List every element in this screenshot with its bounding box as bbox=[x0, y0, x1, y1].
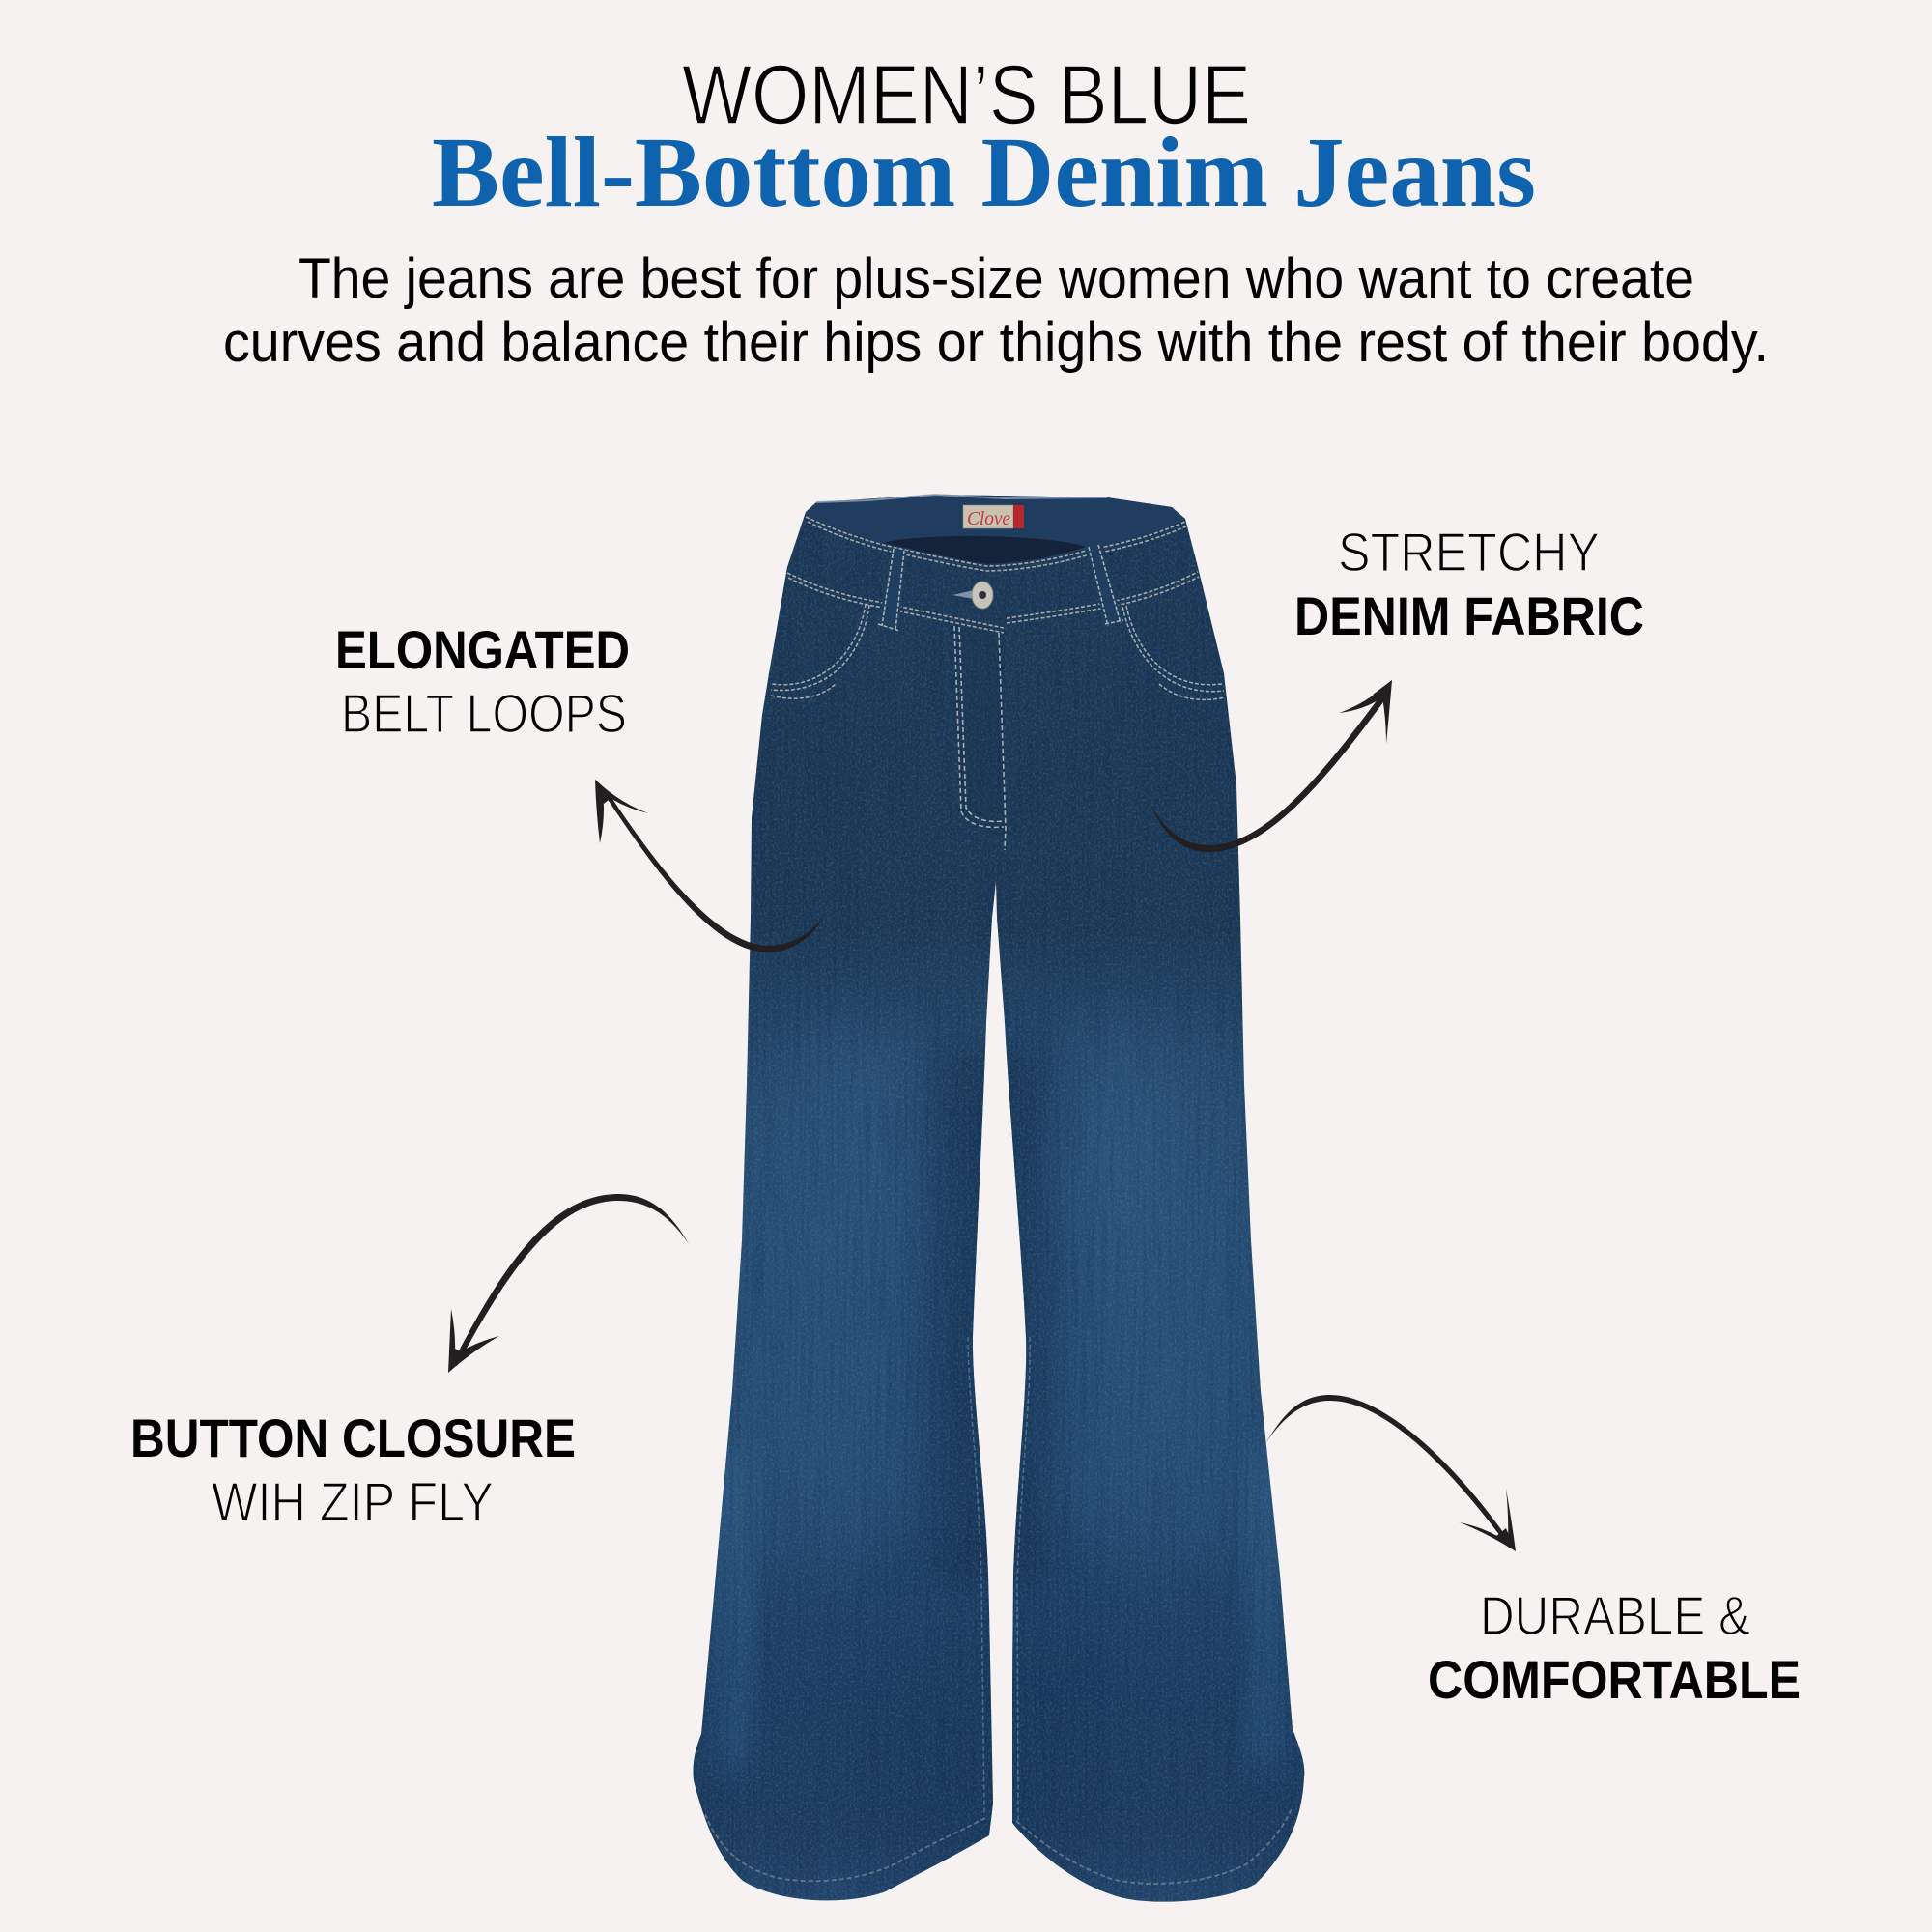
jeans body bbox=[693, 495, 1304, 1902]
title line: women's blue: WOMEN’S BLUE bbox=[682, 48, 1251, 142]
label: stretchy denim fabric: STRETCHY bbox=[1338, 522, 1600, 583]
brand label: Clove bbox=[967, 508, 1010, 529]
label: button closure with zip fly: BUTTON CLOSURE bbox=[130, 1407, 576, 1468]
arrow: to durable and comfortable bbox=[1266, 1395, 1516, 1551]
label: durable and comfortable: DURABLE & bbox=[1480, 1585, 1750, 1647]
belt loop right bbox=[1086, 544, 1123, 627]
jeans illustration bbox=[676, 483, 1314, 1913]
label: elongated belt loops: BELT LOOPS bbox=[341, 683, 627, 745]
label: stretchy denim fabric: DENIM FABRIC bbox=[1294, 585, 1644, 646]
label: button closure with zip fly: WIH ZIP FLY bbox=[212, 1471, 494, 1533]
arrow: to button closure bbox=[448, 1194, 689, 1373]
hem right bbox=[1016, 1806, 1293, 1884]
arrow: to stretchy denim fabric bbox=[1150, 680, 1392, 852]
waistband interior bbox=[806, 495, 1185, 564]
label: durable and comfortable: COMFORTABLE bbox=[1428, 1649, 1801, 1710]
label: stretchy denim fabric bbox=[1294, 522, 1644, 646]
label: button closure with zip fly bbox=[130, 1407, 576, 1533]
title line: bell-bottom denim jeans: Bell-Bottom Denim Jeans bbox=[432, 117, 1536, 228]
label: elongated belt loops: ELONGATED bbox=[335, 619, 630, 680]
fly stitching bbox=[954, 626, 1006, 850]
button bbox=[952, 582, 993, 609]
denim shading bbox=[676, 483, 1314, 1913]
description text: curves and balance their hips or thighs with the rest of their body. bbox=[223, 311, 1769, 374]
waistband frayed top edge bbox=[816, 495, 1107, 502]
pocket right bbox=[1122, 606, 1225, 699]
brand label bbox=[963, 505, 1024, 529]
label: elongated belt loops bbox=[335, 619, 630, 745]
description text: The jeans are best for plus-size women who want to create bbox=[298, 247, 1694, 310]
waistband interior shadow bbox=[883, 536, 1086, 564]
belt loop left bbox=[878, 548, 907, 632]
hem left bbox=[705, 1814, 985, 1881]
title bbox=[432, 48, 1536, 228]
label: durable and comfortable bbox=[1428, 1585, 1801, 1710]
description text bbox=[223, 247, 1769, 374]
waistband stitching bbox=[787, 517, 1199, 633]
leg inseam stitching bbox=[968, 1337, 1030, 1821]
fly placket bbox=[954, 625, 1006, 836]
pocket left bbox=[771, 604, 869, 698]
arrow: to elongated belt loops bbox=[595, 780, 823, 952]
